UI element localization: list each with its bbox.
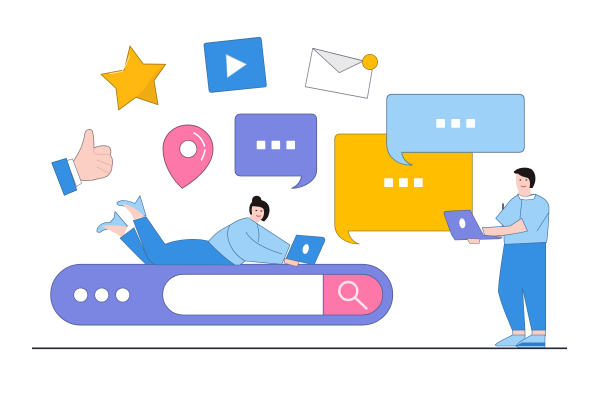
ground line	[32, 347, 567, 349]
upper shoe	[117, 196, 146, 217]
trousers	[498, 242, 546, 330]
speech bubble: purple	[235, 114, 317, 188]
search input field	[163, 274, 323, 315]
icon: location pin	[163, 125, 213, 188]
neck and face	[516, 172, 531, 197]
search bar	[51, 264, 393, 325]
socks	[512, 330, 546, 336]
search button	[323, 274, 383, 315]
forearm	[482, 218, 528, 237]
shoes	[495, 335, 525, 346]
woman lying on search bar	[97, 196, 325, 266]
icon: play button	[204, 37, 266, 92]
collar	[518, 194, 536, 200]
icon: star	[101, 46, 166, 110]
icon: thumbs up	[52, 129, 113, 195]
upper foot	[122, 204, 144, 220]
eyes and mouth	[520, 179, 527, 181]
eyes and mouth	[256, 210, 262, 212]
three dots	[74, 288, 130, 302]
lower foot	[102, 225, 127, 238]
neck and face	[248, 206, 264, 223]
hair	[514, 168, 535, 188]
man standing with laptop	[444, 168, 549, 348]
laptop	[444, 210, 502, 240]
laptop	[286, 235, 325, 265]
hand	[284, 258, 299, 266]
torso and arm	[208, 218, 290, 265]
hair	[249, 200, 270, 222]
trousers	[120, 228, 154, 264]
lower shoe	[97, 212, 128, 232]
hand	[467, 238, 480, 244]
strap	[503, 204, 546, 232]
speech bubble: light blue	[387, 94, 524, 165]
speech bubble: yellow	[335, 134, 472, 244]
icon: envelope	[305, 48, 378, 98]
shirt	[496, 194, 549, 244]
icon: magnifier	[339, 282, 366, 308]
